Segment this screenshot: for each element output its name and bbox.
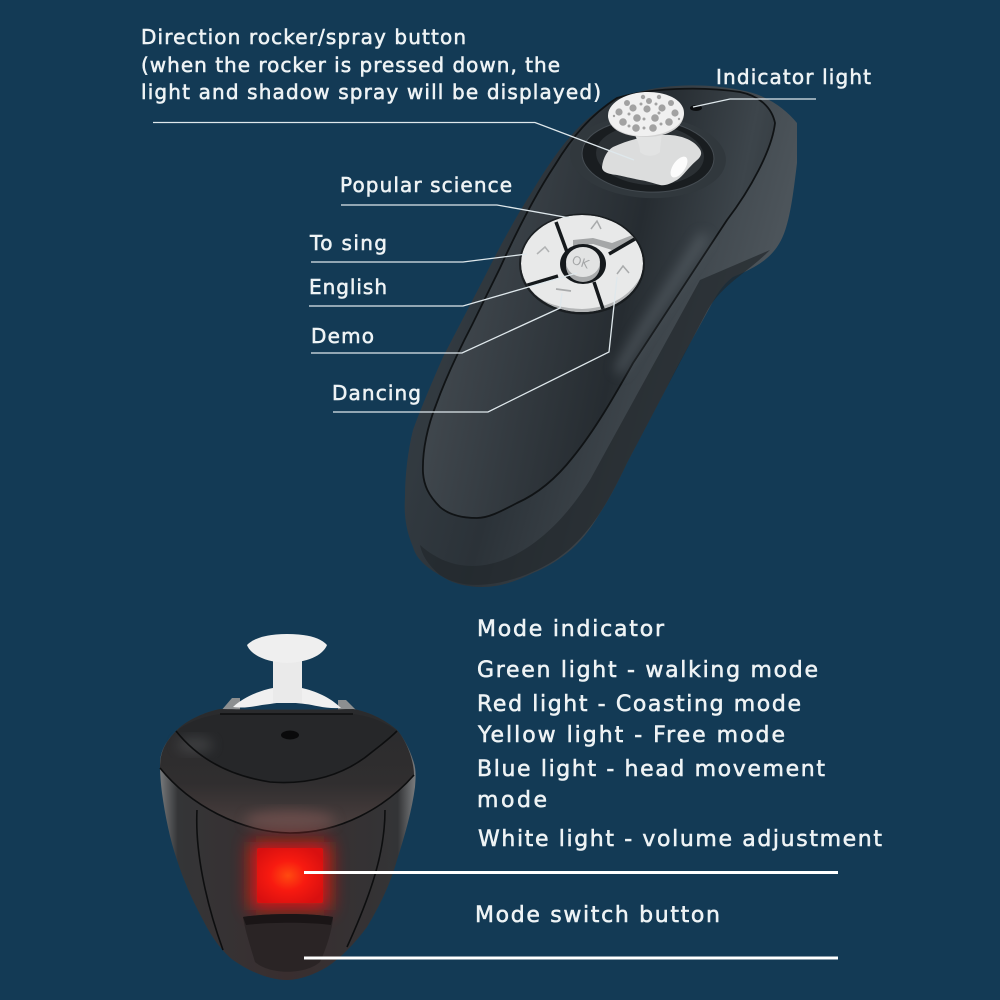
remote control, angled view bbox=[405, 85, 797, 587]
line: indicator bbox=[693, 99, 816, 107]
remote body shell bbox=[405, 85, 797, 587]
mode indicator list: Yellow light - Free mode bbox=[477, 723, 785, 748]
rocker label: Direction rocker/spray button bbox=[141, 25, 466, 49]
line: rocker bbox=[153, 122, 634, 160]
line: mode switch bbox=[304, 956, 838, 960]
red mode light bbox=[257, 848, 323, 903]
arrow marks bbox=[591, 221, 601, 229]
dancing label: Dancing bbox=[332, 381, 421, 405]
joystick stem bbox=[632, 128, 662, 156]
top glow bbox=[245, 810, 335, 830]
lid highlights bbox=[177, 737, 213, 753]
mode indicator list bbox=[477, 617, 882, 852]
button cluster bbox=[518, 214, 645, 320]
joystick perforated cap bbox=[607, 90, 685, 138]
english label: English bbox=[309, 275, 387, 299]
callout lines for remote bbox=[153, 99, 816, 412]
mode indicator list: mode bbox=[477, 788, 547, 813]
indicator light hole bbox=[690, 105, 702, 111]
rocker label: (when the rocker is pressed down, the bbox=[141, 53, 560, 77]
remote top face bbox=[423, 89, 775, 518]
popular science label: Popular science bbox=[340, 173, 512, 197]
egg body bbox=[160, 709, 416, 980]
to sing label: To sing bbox=[309, 231, 387, 255]
joystick socket bbox=[568, 112, 728, 202]
mode indicator list: White light - volume adjustment bbox=[478, 827, 882, 852]
mode switch button bbox=[243, 914, 333, 972]
line: demo bbox=[311, 293, 562, 353]
mode indicator list: Mode indicator bbox=[477, 617, 665, 642]
device front view bbox=[160, 634, 416, 980]
mode indicator list: Red light - Coasting mode bbox=[477, 692, 801, 717]
face highlight streak bbox=[618, 235, 705, 372]
rocker label bbox=[141, 25, 601, 104]
rocker label: light and shadow spray will be displayed) bbox=[141, 80, 601, 104]
line: popular science bbox=[341, 205, 570, 218]
indicator hole front bbox=[281, 730, 299, 740]
mode indicator list: Blue light - head movement bbox=[477, 757, 825, 782]
lower shell shade bbox=[420, 250, 770, 585]
upper cap band bbox=[160, 709, 414, 833]
base highlight bbox=[667, 154, 691, 180]
mode switch label: Mode switch button bbox=[475, 903, 720, 928]
button faces and gaps bbox=[518, 215, 643, 320]
mode indicator list: Green light - walking mode bbox=[477, 658, 818, 683]
indicator light label: Indicator light bbox=[716, 65, 871, 89]
joystick front bbox=[220, 634, 358, 712]
mode callout lines bbox=[304, 872, 838, 958]
line: english bbox=[309, 273, 577, 306]
seam lines bbox=[160, 714, 414, 950]
OK button: OK bbox=[570, 253, 592, 272]
line: dancing bbox=[333, 277, 617, 412]
demo label: Demo bbox=[311, 324, 374, 348]
joystick white base bbox=[602, 135, 701, 185]
top lid bbox=[177, 714, 397, 783]
line: mode indicator bbox=[304, 871, 838, 874]
red glow bbox=[250, 842, 330, 910]
line: to sing bbox=[311, 254, 527, 262]
